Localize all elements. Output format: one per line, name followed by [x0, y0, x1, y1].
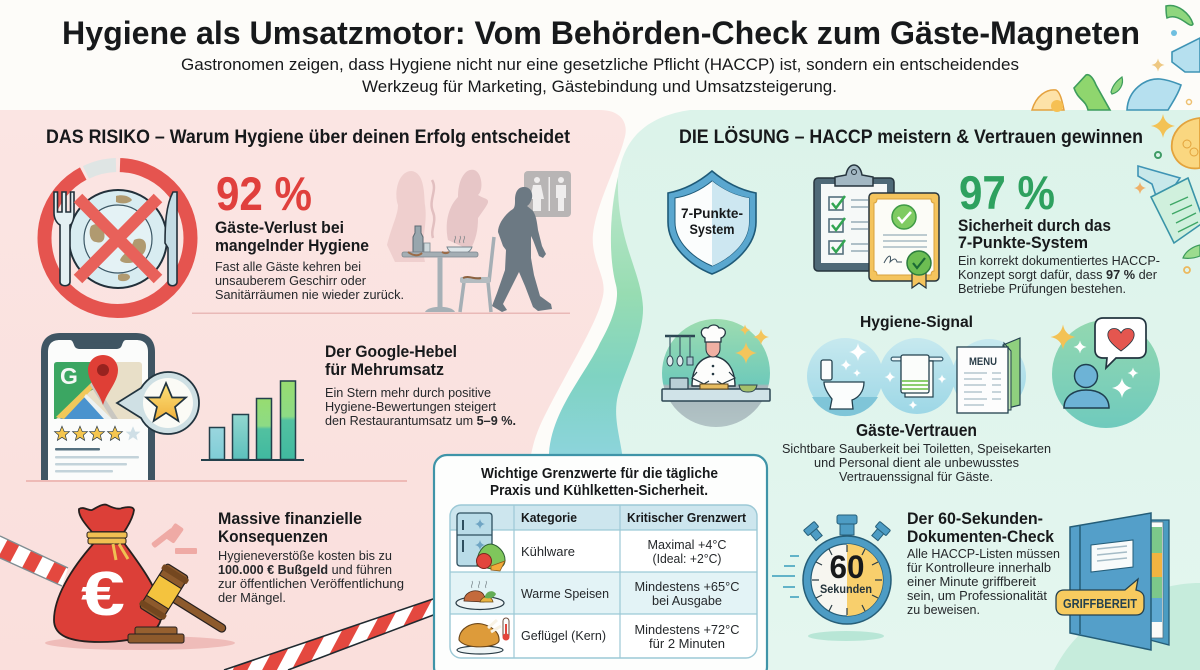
heading: 60-Sekunden-Check — [907, 509, 1055, 546]
icon: smartphone with Google Maps — [41, 333, 155, 482]
illustration: light gavel — [151, 523, 197, 554]
row: Kühlware: Kühlware — [521, 544, 575, 559]
text: Google-Hebel body: Ein Stern mehr durch positive — [325, 385, 491, 400]
icon: star speech bubble — [117, 372, 199, 434]
heading: Grenzwerte — [481, 466, 718, 499]
icon: clean menu: MENU — [969, 356, 997, 368]
subtitle: Gastronomen zeigen, dass Hygiene nicht nur eine gesetzliche Pflicht (HACCP) ist, sondern ein entscheidendes — [181, 55, 1019, 74]
icon: smartphone with Google Maps: G — [60, 363, 78, 389]
heading: 7-Punkte-System — [958, 216, 1111, 252]
text: finanzielle Konsequenzen body: Hygieneverstöße kosten bis zu — [218, 548, 392, 563]
heading: Google-Hebel: Der Google-Hebel — [325, 342, 457, 361]
text: Gäste-Verlust body — [215, 259, 404, 302]
row: Kühlware: Maximal +4°C — [648, 537, 726, 552]
heading: Grenzwerte: Wichtige Grenzwerte für die tägliche — [481, 466, 718, 482]
text: Gäste-Vertrauen body: und Personal dient ale unbewusstes — [814, 455, 1019, 470]
row: Warme Speisen: Warme Speisen — [521, 586, 609, 601]
text: Gäste-Verlust body: Sanitärräumen nie wieder zurück. — [215, 287, 404, 302]
heading: Das Risiko: DAS RISIKO – Warum Hygiene über deinen Erfolg entscheidet — [46, 126, 570, 148]
illustration: guests leaving dirty restaurant — [387, 170, 571, 312]
table header — [521, 510, 747, 525]
text: Gäste-Vertrauen body — [782, 441, 1051, 484]
text: Google-Hebel body: den Restaurantumsatz um 5–9 %. — [325, 413, 516, 428]
text: 60-Sekunden-Check body: Alle HACCP-Listen müssen — [907, 546, 1060, 561]
heading: Die Lösung: DIE LÖSUNG – HACCP meistern & Vertrauen gewinnen — [679, 125, 1143, 148]
row: Kühlware — [521, 537, 726, 566]
subtitle — [181, 55, 1019, 96]
heading: Hygiene-Signal: Hygiene-Signal — [860, 314, 973, 331]
text: finanzielle Konsequenzen body: zur öffentlichen Veröffentlichung — [218, 576, 404, 591]
icon: 60 second stopwatch: Sekunden — [820, 582, 872, 596]
divider line under second block — [26, 480, 407, 482]
row: Kühlware: (Ideal: +2°C) — [652, 551, 722, 566]
heading: 7-Punkte-System: Sicherheit durch das — [958, 216, 1111, 235]
text: Gäste-Verlust body: unsauberem Geschirr oder — [215, 273, 367, 288]
icon: roast chicken with thermometer — [457, 618, 510, 654]
heading: 60-Sekunden-Check: Dokumenten-Check — [907, 527, 1055, 546]
icon: guest trust with heart bubble — [1050, 318, 1160, 428]
text: Gäste-Verlust body: Fast alle Gäste kehren bei — [215, 259, 361, 274]
heading: Grenzwerte: Praxis und Kühlketten-Sicherheit. — [490, 483, 708, 499]
icon: clean menu — [952, 338, 1026, 413]
icon: shield 7-Punkte-System — [668, 171, 756, 274]
text: 60-Sekunden-Check body: für Kontrolleure innerhalb — [907, 560, 1051, 575]
bar chart: revenue growth — [201, 381, 304, 461]
icon: dirty plate prohibited — [44, 165, 190, 311]
text: 60-Sekunden-Check body: zu beweisen. — [907, 602, 980, 617]
decoration: top right hygiene icons — [1032, 5, 1200, 273]
icon: shield 7-Punkte-System: 7-Punkte- — [681, 205, 743, 221]
text: Google-Hebel body — [325, 385, 516, 428]
text: Google-Hebel body: Hygiene-Bewertungen steigert — [325, 399, 496, 414]
row: Geflügel: für 2 Minuten — [649, 636, 725, 651]
heading: Gäste-Verlust: Gäste-Verlust bei — [215, 218, 344, 237]
icon: clean towel — [879, 338, 955, 414]
table: Grenzwerte — [450, 505, 757, 658]
icon: HACCP binder griffbereit: GRIFFBEREIT — [1063, 597, 1137, 611]
text: 7-Punkte-System body: Ein korrekt dokumentiertes HACCP- — [958, 253, 1160, 268]
icon: 60 second stopwatch — [772, 515, 891, 641]
icon: shield 7-Punkte-System: System — [690, 221, 734, 237]
text: finanzielle Konsequenzen body: der Mängel. — [218, 590, 286, 605]
row: Warme Speisen — [521, 579, 740, 608]
row: Geflügel — [521, 622, 740, 651]
stat: 92 %: 92 % — [216, 167, 312, 220]
icon: chef in clean kitchen — [662, 319, 770, 427]
text: finanzielle Konsequenzen body — [218, 548, 404, 605]
icon: money bag with gavel — [45, 505, 239, 652]
heading: 60-Sekunden-Check: Der 60-Sekunden- — [907, 509, 1043, 528]
text: 60-Sekunden-Check body: einer Minute griffbereit — [907, 574, 1036, 589]
icon: HACCP certificate — [869, 193, 939, 288]
heading: finanzielle Konsequenzen — [218, 509, 362, 546]
text: 7-Punkte-System body — [958, 253, 1160, 296]
text: Gäste-Vertrauen body: Vertrauenssignal für Gäste. — [839, 469, 993, 484]
text: 7-Punkte-System body: Betriebe Prüfungen bestehen. — [958, 281, 1126, 296]
illustration: barrier tape bottom — [224, 598, 436, 670]
title: Hygiene als Umsatzmotor: Vom Behörden-Check zum Gäste-Magneten — [62, 15, 1140, 51]
icon: money bag with gavel: € — [81, 560, 125, 629]
text: 60-Sekunden-Check body: sein, um Professionalität — [907, 588, 1047, 603]
text: 60-Sekunden-Check body — [907, 546, 1060, 617]
icon: warm meal — [456, 581, 504, 610]
icon: HACCP binder griffbereit — [1056, 513, 1169, 650]
row: Geflügel: Geflügel (Kern) — [521, 628, 606, 643]
heading: Gäste-Verlust — [215, 218, 369, 255]
table header: Kritischer Grenzwert — [627, 510, 747, 525]
icon: 60 second stopwatch: 60 — [830, 549, 864, 585]
illustration: barrier tape left — [0, 536, 68, 586]
row: Warme Speisen: bei Ausgabe — [652, 593, 722, 608]
heading: Google-Hebel — [325, 342, 457, 379]
panel: Das Risiko — [0, 126, 571, 670]
heading: Gäste-Vertrauen: Gäste-Vertrauen — [856, 420, 977, 440]
panel: Die Lösung — [662, 125, 1169, 650]
icon: fridge with vegetables — [457, 513, 505, 571]
stat: 97 %: 97 % — [959, 166, 1055, 219]
text: finanzielle Konsequenzen body: 100.000 € Bußgeld und führen — [218, 562, 392, 577]
subtitle: Werkzeug für Marketing, Gästebindung und Umsatzsteigerung. — [362, 77, 837, 96]
text: 7-Punkte-System body: Konzept sorgt dafür, dass 97 % der — [958, 267, 1158, 282]
heading: finanzielle Konsequenzen: Massive finanzielle — [218, 509, 362, 528]
divider line under first block — [192, 312, 570, 314]
icon: clipboard checklist — [814, 165, 894, 271]
heading: finanzielle Konsequenzen: Konsequenzen — [218, 527, 328, 546]
table header: Kategorie — [521, 510, 577, 525]
heading: Google-Hebel: für Mehrumsatz — [325, 360, 444, 379]
icon: clean toilet — [807, 338, 883, 416]
panel: Grenzwerte table card — [434, 455, 767, 670]
heading: Gäste-Verlust: mangelnder Hygiene — [215, 236, 369, 255]
row: Geflügel: Mindestens +72°C — [634, 622, 740, 637]
row: Warme Speisen: Mindestens +65°C — [634, 579, 740, 594]
heading: 7-Punkte-System: 7-Punkte-System — [958, 233, 1088, 252]
text: Gäste-Vertrauen body: Sichtbare Sauberkeit bei Toiletten, Speisekarten — [782, 441, 1051, 456]
